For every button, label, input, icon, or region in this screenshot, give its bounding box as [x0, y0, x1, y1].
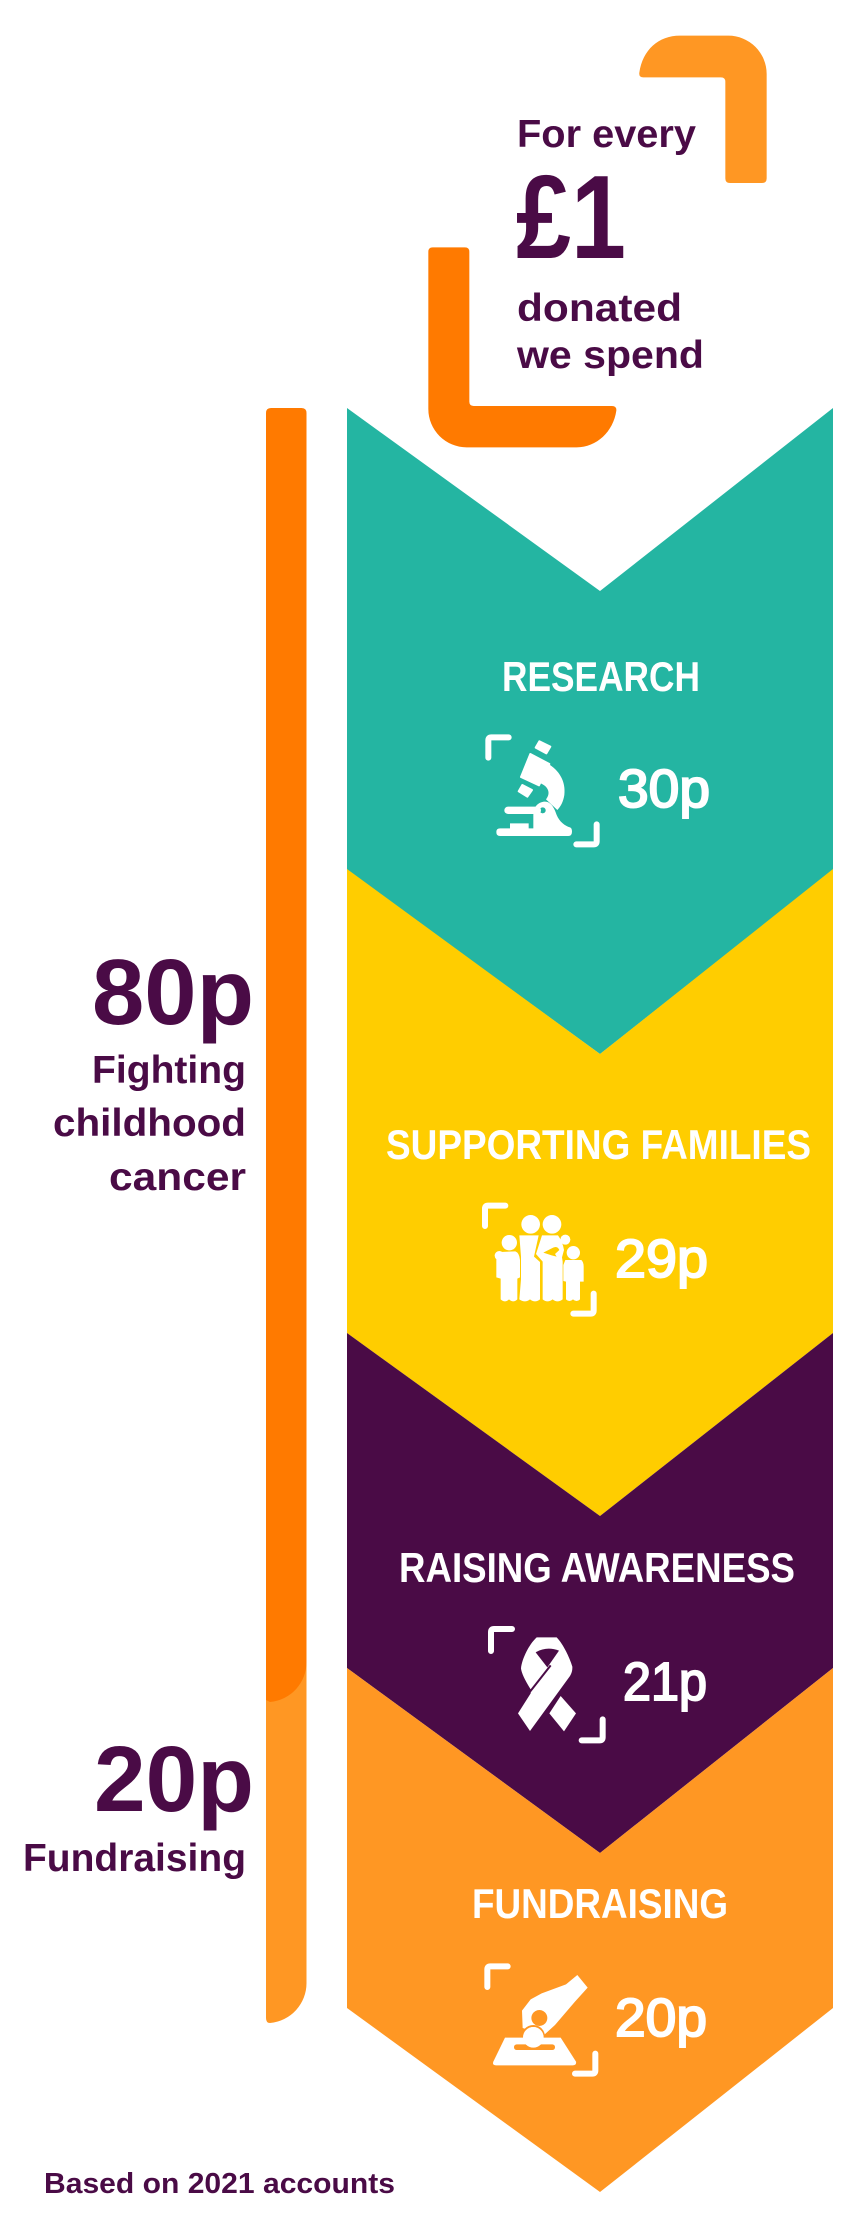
text block: 80p fighting childhood cancer: Fighting	[92, 1049, 246, 1092]
panel: raising awareness chevron	[347, 1333, 833, 1853]
heading: supporting families: SUPPORTING FAMILIES	[386, 1121, 811, 1168]
panel: research chevron	[347, 408, 833, 1054]
title: for every £1 donated we spend: we spend	[516, 334, 704, 377]
text block: 20p fundraising: Fundraising	[23, 1837, 246, 1880]
value: 29p: 29p	[615, 1229, 708, 1289]
title: for every £1 donated we spend: donated	[517, 287, 682, 330]
heading: research: RESEARCH	[502, 653, 700, 700]
value: 21p: 21p	[623, 1652, 707, 1712]
panel: fundraising chevron	[347, 1668, 833, 2192]
icon: hand dropping coin in box	[487, 1966, 595, 2074]
icon: family group	[485, 1206, 594, 1314]
heading: raising awareness: RAISING AWARENESS	[399, 1544, 795, 1591]
icon: microscope	[488, 737, 597, 844]
heading: fundraising: FUNDRAISING	[472, 1880, 728, 1927]
text block: 80p fighting childhood cancer: 80p	[92, 940, 254, 1044]
icon: lower orange corner bracket	[428, 247, 616, 447]
icon: awareness ribbon	[491, 1629, 603, 1740]
text block: 80p fighting childhood cancer	[53, 940, 254, 1199]
footnote: based on 2021 accounts: Based on 2021 accounts	[44, 2168, 395, 2200]
text block: 80p fighting childhood cancer: cancer	[109, 1156, 246, 1199]
panel: left progress bar, 20p fundraising segment	[266, 1592, 307, 2023]
value: 30p: 30p	[618, 759, 710, 819]
text block: 20p fundraising	[23, 1727, 254, 1880]
text block: 20p fundraising: 20p	[94, 1727, 254, 1831]
text block: 80p fighting childhood cancer: childhood	[53, 1102, 246, 1145]
panel: left progress bar, 80p fighting childhood cancer segment	[266, 408, 307, 1702]
value: 20p: 20p	[615, 1988, 707, 2048]
title: for every £1 donated we spend: £1	[516, 151, 626, 284]
icon: upper orange corner bracket	[639, 36, 767, 183]
title: for every £1 donated we spend: For every	[517, 113, 696, 156]
panel: supporting families chevron	[347, 869, 833, 1516]
title: for every £1 donated we spend	[516, 113, 704, 377]
